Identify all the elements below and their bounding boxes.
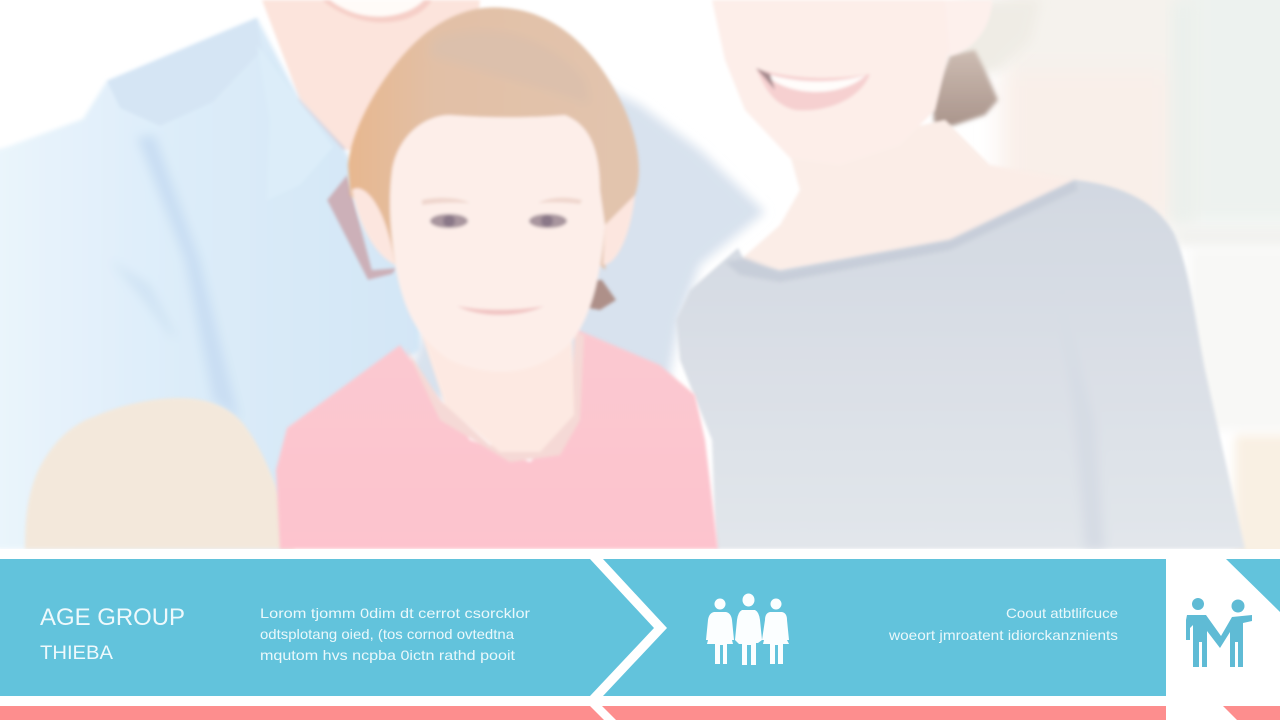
man shoulder right: [400, 80, 765, 400]
boy hair tuft: [588, 280, 616, 310]
family photo: [0, 0, 1280, 549]
text block: left description: mqutom hvs ncpba 0ictn rathd pooit: [260, 647, 515, 663]
boy hair: [348, 7, 639, 270]
boy: [276, 7, 718, 549]
woman sweater: [676, 180, 1245, 549]
man shirt fold: [137, 135, 240, 420]
boy eyes: [430, 214, 468, 228]
background right side: [1000, 0, 1280, 230]
woman ear: [945, 0, 992, 56]
icon: three people: [706, 594, 789, 665]
icon: two people holding hands: [1186, 598, 1252, 667]
blue corner triangle: [1226, 559, 1280, 612]
boy lips: [457, 306, 544, 315]
woman neck: [738, 120, 1085, 270]
knee: [25, 398, 295, 549]
subheading: THIEBA: [40, 643, 113, 664]
man neck: [262, 0, 480, 150]
man shirt: [0, 18, 420, 549]
woman light hair: [960, 0, 1040, 80]
woman face: [712, 0, 960, 165]
woman: [676, 0, 1245, 549]
boy ears: [352, 188, 395, 265]
blue band left segment: [0, 559, 654, 696]
coral corner triangle: [1223, 706, 1280, 720]
man collar: [107, 18, 262, 126]
coral band left segment: [0, 706, 604, 720]
woman sweater neckline: [725, 180, 1078, 282]
blue band middle segment: [603, 559, 1166, 696]
man smile: [322, 0, 432, 23]
text block: left description: odtsplotang oied, (tos cornod ovtedtna: [260, 626, 514, 642]
woman sleeve seam: [1060, 300, 1105, 549]
sofa: [1176, 226, 1280, 560]
boy face: [390, 115, 605, 372]
woman lips: [756, 68, 870, 110]
coral band middle segment: [602, 706, 1166, 720]
woman dark hair: [932, 50, 998, 130]
boy collar: [405, 332, 584, 462]
boy brows: [422, 198, 582, 205]
man undershirt: [327, 175, 397, 280]
boy neck: [420, 330, 574, 452]
text block: right description: woeort jmroatent idiorckanznients: [888, 627, 1118, 643]
heading: age group: AGE GROUP: [40, 604, 185, 631]
text block: left description: [260, 605, 530, 663]
window column: [1172, 0, 1194, 225]
man sleeve fold: [110, 260, 178, 340]
boy shirt: [276, 330, 718, 549]
text block: right description: [888, 605, 1118, 643]
text block: right description: Coout atbtlifcuce: [1006, 605, 1118, 621]
text block: left description: Lorom tjomm 0dim dt cerrot csorcklor: [260, 605, 530, 621]
man: [0, 0, 765, 549]
